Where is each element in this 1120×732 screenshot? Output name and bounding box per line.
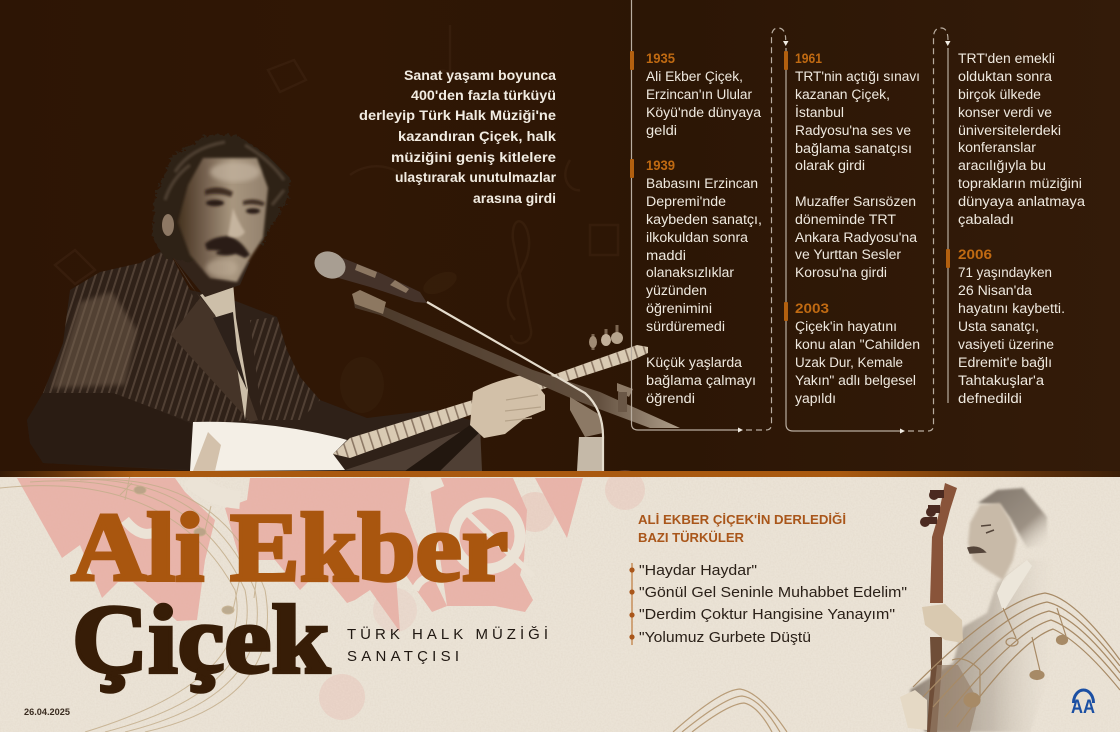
lower hand bbox=[900, 690, 927, 730]
timeline column 3: konser verdi ve bbox=[958, 105, 1052, 120]
intro text: 400'den fazla türküyü bbox=[411, 88, 556, 103]
bottom music staff bbox=[673, 689, 787, 732]
title: Ali Ekber: Ali Ekber bbox=[71, 494, 508, 601]
intro text: derleyip Türk Halk Müziği'ne bbox=[359, 108, 557, 123]
hair bbox=[978, 488, 1047, 548]
timeline column 3: dünyaya anlatmaya bbox=[958, 194, 1086, 209]
timeline column 1: Küçük yaşlarda bbox=[646, 355, 742, 370]
intro text: Sanat yaşamı boyunca bbox=[404, 68, 557, 83]
bağlama neck bbox=[333, 325, 648, 458]
subtitle: SANATÇISI bbox=[347, 648, 459, 665]
timeline column 3: birçok ülkede bbox=[958, 87, 1041, 102]
cuff and hand at the body bbox=[193, 432, 221, 471]
intro text: kazandıran Çiçek, halk bbox=[398, 129, 557, 144]
songs heading: ALİ EKBER ÇİÇEK'İN DERLEDİĞİ bbox=[638, 512, 846, 527]
AA logo bbox=[1071, 690, 1095, 718]
portrait photo: Ali Ekber Çiçek with bağlama and microphone bbox=[27, 135, 680, 471]
intro text: müziğini geniş kitlelere bbox=[391, 150, 557, 165]
timeline column 1: sürdüremedi bbox=[646, 319, 725, 334]
timeline column 3: 2006 bbox=[958, 246, 992, 262]
timeline column 2: Korosu'na girdi bbox=[795, 265, 887, 280]
timeline column 2: olarak girdi bbox=[795, 158, 865, 173]
timeline column 1: bağlama çalmayı bbox=[646, 373, 756, 388]
right music staff bbox=[913, 593, 1120, 727]
lapel bbox=[167, 248, 258, 422]
songs list: "Yolumuz Gurbete Düştü bbox=[639, 630, 811, 646]
nose bbox=[228, 208, 245, 237]
timeline column 3: 26 Nisan'da bbox=[958, 283, 1033, 298]
timeline column 2: Yakın" adlı belgesel bbox=[795, 373, 916, 388]
eyebrows, eyes, moustache, mouth bbox=[205, 187, 265, 258]
AA logo: AA bbox=[1071, 697, 1095, 718]
timeline column 2: Ankara Radyosu'na bbox=[795, 230, 918, 245]
tie bbox=[213, 312, 247, 390]
timeline column 2: Muzaffer Sarısözen bbox=[795, 194, 916, 209]
timeline column 2 bbox=[795, 50, 920, 406]
timeline column 1: öğrenimini bbox=[646, 301, 712, 316]
hair highlights bbox=[165, 142, 284, 205]
songs list: "Derdim Çoktur Hangisine Yanayım" bbox=[639, 607, 895, 623]
lower arm bbox=[27, 393, 207, 470]
facial features bbox=[968, 525, 994, 553]
timeline column 3 bbox=[958, 51, 1086, 406]
timeline column 3: konferanslar bbox=[958, 140, 1037, 155]
main title bbox=[71, 494, 508, 693]
timeline column 2: İstanbul bbox=[795, 105, 844, 120]
timeline column 2: kazanan Çiçek, bbox=[795, 87, 890, 102]
subtitle: TÜRK HALK MÜZİĞİ bbox=[347, 625, 548, 643]
subtitle bbox=[347, 625, 548, 665]
lit sleeve bbox=[52, 292, 137, 388]
hair bbox=[152, 135, 290, 262]
timeline column 3: Tahtakuşlar'a bbox=[958, 373, 1045, 388]
songs list: "Gönül Gel Seninle Muhabbet Edelim" bbox=[639, 585, 907, 601]
timeline column 3: aracılığıyla bu bbox=[958, 158, 1046, 173]
timeline column 3: TRT'den emekli bbox=[958, 51, 1055, 66]
playing hand bbox=[470, 374, 545, 438]
timeline column 2: ve Yurttan Sesler bbox=[795, 247, 902, 262]
timeline column 1: kaybeden sanatçı, bbox=[646, 212, 762, 227]
paper background bbox=[0, 476, 1120, 732]
upper hand bbox=[922, 604, 963, 643]
bağlama body bbox=[190, 422, 347, 471]
paper grain texture bbox=[0, 476, 1120, 732]
timeline column 3: Usta sanatçı, bbox=[958, 319, 1039, 334]
face bbox=[968, 503, 1017, 580]
ear bbox=[162, 214, 174, 236]
songs list bbox=[629, 563, 907, 646]
timeline column 1: Babasını Erzincan bbox=[646, 176, 758, 191]
pale treble clef in pink pattern bbox=[125, 478, 533, 590]
date: 26.04.2025 bbox=[24, 707, 70, 717]
timeline column 2: döneminde TRT bbox=[795, 212, 896, 227]
timeline column 3: vasiyeti üzerine bbox=[958, 337, 1054, 352]
timeline column 2: yapıldı bbox=[795, 391, 836, 406]
forehead highlight bbox=[210, 162, 260, 182]
microphone cable bbox=[427, 302, 603, 471]
timeline column 1: Ali Ekber Çiçek, bbox=[646, 69, 743, 84]
timeline column 3: çabaladı bbox=[958, 212, 1014, 227]
timeline column 2: Uzak Dur, Kemale bbox=[795, 355, 903, 370]
timeline year markers bbox=[630, 51, 950, 321]
timeline column 1: 1935 bbox=[646, 50, 675, 66]
sleeve below bağlama neck bbox=[345, 425, 482, 471]
timeline column 1: maddi bbox=[646, 248, 686, 263]
timeline column 3: hayatını kaybetti. bbox=[958, 301, 1065, 316]
face bbox=[178, 158, 268, 282]
timeline column 2: bağlama sanatçısı bbox=[795, 141, 912, 156]
neck bbox=[167, 240, 250, 297]
instrument neck bbox=[930, 483, 957, 603]
shirt bbox=[997, 560, 1032, 612]
microphone bbox=[310, 246, 427, 303]
songs heading bbox=[638, 512, 846, 545]
shirt and collar bbox=[200, 282, 248, 420]
timeline column 1: ilkokuldan sonra bbox=[646, 230, 749, 245]
timeline column 3: Edremit'e bağlı bbox=[958, 355, 1052, 370]
tuning pegs bbox=[920, 490, 944, 527]
dark top background bbox=[0, 0, 1120, 472]
timeline column 3: defnedildi bbox=[958, 391, 1022, 406]
orange divider bar bbox=[0, 471, 1120, 477]
timeline column 2: Radyosu'na ses ve bbox=[795, 123, 911, 138]
timeline column 2: TRT'nin açtığı sınavı bbox=[795, 69, 920, 84]
songs list: "Haydar Haydar" bbox=[639, 563, 757, 579]
timeline column 1: Erzincan'ın Ulular bbox=[646, 87, 753, 102]
left music staff bbox=[0, 475, 268, 732]
intro text: ulaştırarak unutulmazlar bbox=[395, 170, 557, 185]
faded musician with bağlama bbox=[900, 483, 1060, 732]
jacket bbox=[27, 248, 482, 471]
timeline connector lines bbox=[632, 0, 950, 434]
faint background music notes bbox=[55, 25, 618, 413]
timeline column 2: Çiçek'in hayatını bbox=[795, 319, 897, 334]
timeline column 1: olanaksızlıklar bbox=[646, 265, 735, 280]
songs heading: BAZI TÜRKÜLER bbox=[638, 530, 745, 545]
instrument body bbox=[930, 665, 978, 732]
timeline column 2: 1961 bbox=[795, 50, 822, 66]
timeline column 3: toprakların müziğini bbox=[958, 176, 1082, 191]
timeline column 3: 71 yaşındayken bbox=[958, 265, 1052, 280]
timeline column 2: 2003 bbox=[795, 300, 829, 316]
timeline column 3: üniversitelerdeki bbox=[958, 123, 1061, 138]
intro text bbox=[359, 68, 557, 206]
timeline column 2: konu alan "Cahilden bbox=[795, 337, 920, 352]
timeline column 1: yüzünden bbox=[646, 283, 707, 298]
timeline column 1: 1939 bbox=[646, 157, 675, 173]
intro text: arasına girdi bbox=[473, 191, 556, 206]
microphone stand bbox=[352, 290, 680, 471]
timeline column 1: öğrendi bbox=[646, 391, 695, 406]
chin highlight bbox=[206, 259, 238, 277]
timeline column 1: geldi bbox=[646, 123, 677, 138]
pink music pattern bbox=[17, 470, 645, 720]
timeline column 1: Depremi'nde bbox=[646, 194, 726, 209]
title: Çiçek: Çiçek bbox=[72, 586, 330, 693]
timeline column 1 bbox=[646, 50, 762, 406]
timeline column 1: Köyü'nde dünyaya bbox=[646, 105, 762, 120]
jacket fading into paper bbox=[910, 560, 1060, 732]
timeline column 3: olduktan sonra bbox=[958, 69, 1053, 84]
jacket pinstripes bbox=[43, 248, 320, 425]
